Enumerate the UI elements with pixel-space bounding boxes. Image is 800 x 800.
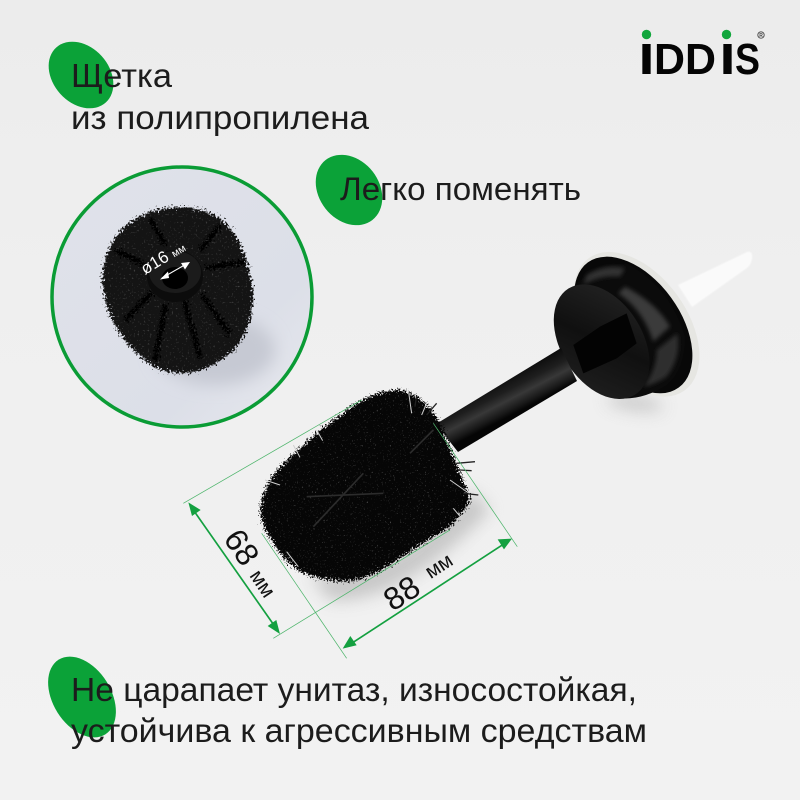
logo: IDDIS: R [759,33,763,39]
heading: easy to replace: Легко поменять [340,171,581,207]
inset brush hub [147,250,203,302]
product: cap with white ring [534,229,725,420]
logo: IDDIS: D [654,35,685,84]
inset diameter arrow [160,262,190,280]
dimension: 68 mm: 68 [217,522,267,572]
green blob: heading 1 [35,29,127,121]
heading: brush material: Щетка [71,57,173,94]
logo: IDDIS [638,30,764,84]
logo: IDDIS: S [735,35,760,84]
brush head [261,390,478,581]
dimension: 88 mm: 88 [377,568,426,618]
dimension: 68 mm [183,400,450,638]
bottom caption: устойчива к агрессивным средствам [71,712,647,749]
heading: brush material: из полипропилена [71,99,370,136]
logo: IDDIS: I [638,35,654,84]
green blob: bottom caption [34,644,130,750]
heading: brush material [71,57,370,136]
logo: IDDIS: D [685,35,716,84]
logo: IDDIS: I [720,35,736,84]
product: white wall rod [678,252,752,307]
dimension: 88 mm [262,423,517,658]
product: handle rod [436,348,577,452]
green blob: heading 2 [302,142,396,238]
inset brush shadow [155,315,275,385]
bottom caption: Не царапает унитаз, износостойкая, [71,671,637,708]
dimension: 88 mm: мм [421,549,457,584]
soft shadows under the product [310,392,664,600]
inset: brush end view with hole diameter [52,167,312,427]
dimension: 68 mm: мм [245,566,280,602]
inset diameter label: ø16 мм [137,237,189,278]
inset brush head [103,207,253,373]
bottom caption [71,671,647,749]
